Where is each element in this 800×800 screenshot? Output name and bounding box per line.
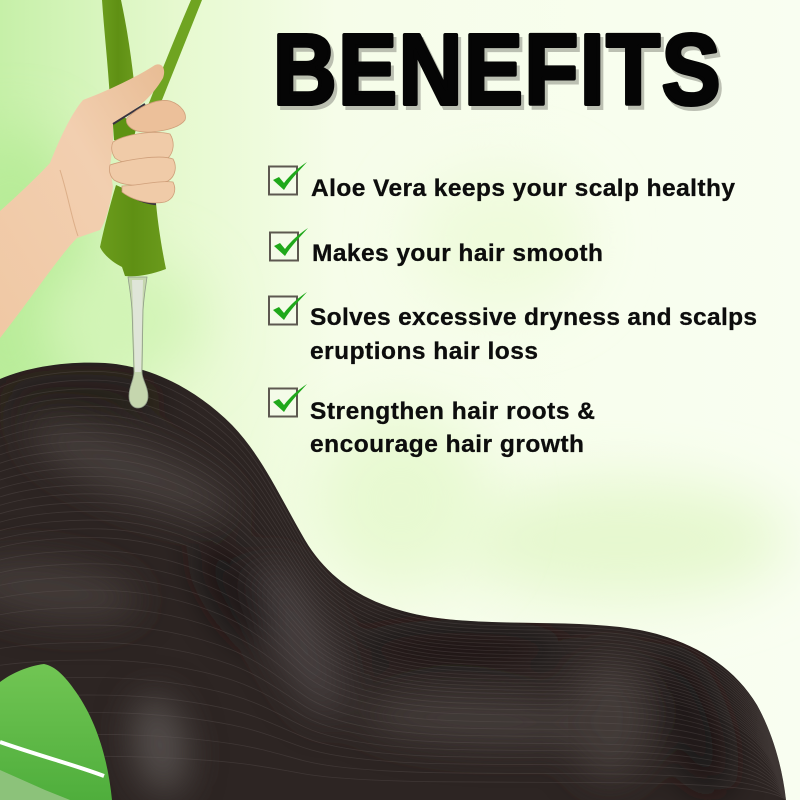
bottom-left green panel seen through the hair xyxy=(0,660,125,800)
leaf: upper right blade xyxy=(147,0,202,108)
icon: checkbox xyxy=(270,228,308,260)
hair strands xyxy=(0,371,786,800)
title: BENEFITS xyxy=(273,14,722,125)
benefit 4: encourage hair growth xyxy=(310,431,584,458)
fingers xyxy=(109,100,185,203)
hand and forearm xyxy=(0,64,185,338)
aloe vera leaves xyxy=(100,0,202,276)
leaf: lower cut section xyxy=(100,185,166,276)
text: Solves excessive dryness and scalps xyxy=(310,304,757,331)
text: Aloe Vera keeps your scalp healthy xyxy=(311,175,735,202)
title: BENEFITS xyxy=(276,18,725,129)
text: Strengthen hair roots & xyxy=(310,398,595,425)
icon: checkbox xyxy=(269,162,307,194)
benefit 4 xyxy=(269,384,595,458)
icon: checkbox xyxy=(269,292,307,324)
icon: checkbox xyxy=(269,384,307,416)
leaf: upper left blade xyxy=(102,0,134,100)
text: Makes your hair smooth xyxy=(312,240,603,267)
hair xyxy=(0,362,786,800)
benefit 2 xyxy=(270,228,603,267)
leaf: inside the grip xyxy=(112,110,137,145)
benefit 1 xyxy=(269,162,735,202)
benefit 3 xyxy=(269,292,757,365)
benefit 3: eruptions hair loss xyxy=(310,338,538,365)
aloe gel drip xyxy=(128,277,148,408)
